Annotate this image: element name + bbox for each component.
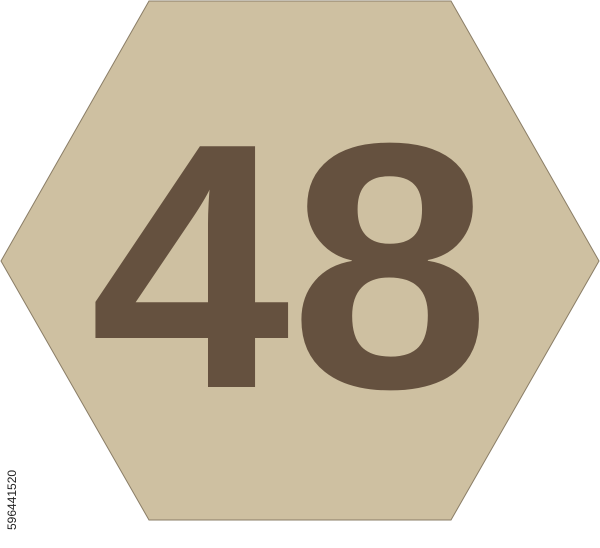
watermark id: 596441520 <box>5 470 19 530</box>
number 48: 48 <box>90 71 490 462</box>
